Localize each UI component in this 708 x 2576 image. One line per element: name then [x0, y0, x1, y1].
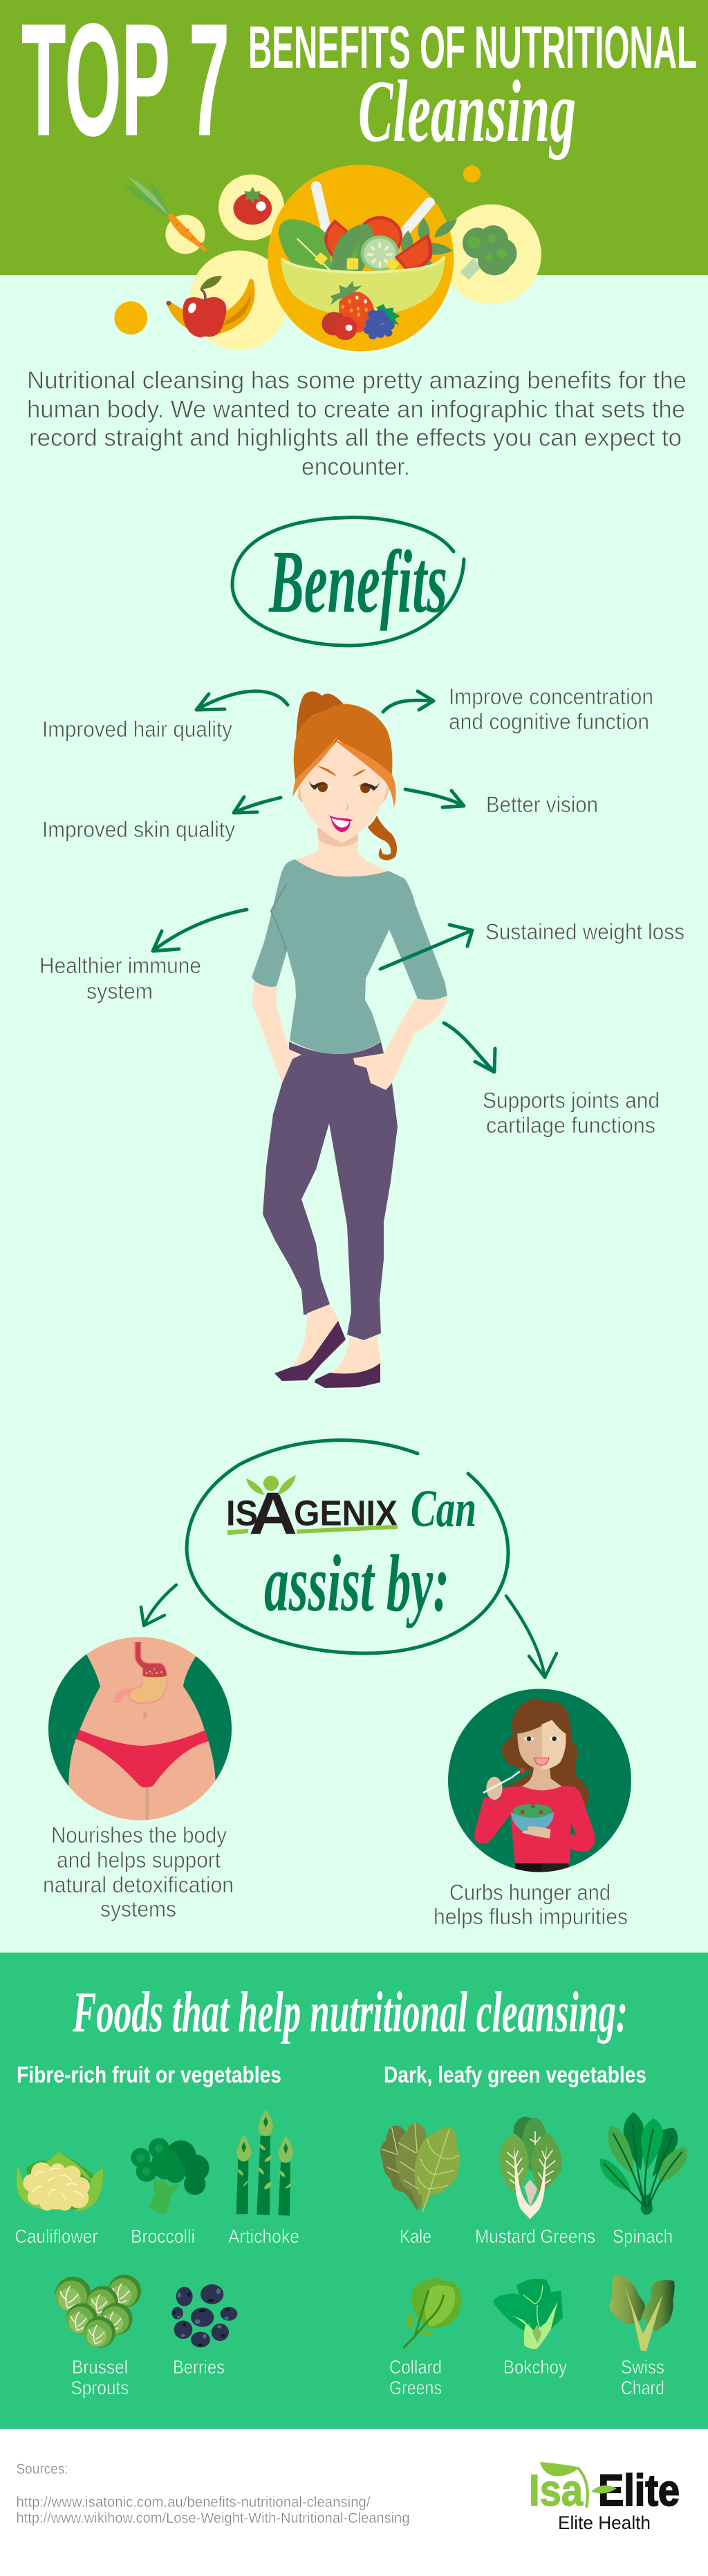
icon: broccoli — [460, 225, 516, 280]
food labels: Collard — [389, 2356, 442, 2378]
eyes — [309, 780, 380, 793]
food labels: Artichoke — [228, 2226, 299, 2247]
label: immune: system — [86, 979, 153, 1004]
face right — [541, 1720, 566, 1769]
icon: bokchoy — [493, 2279, 563, 2349]
neck shadow — [317, 828, 358, 847]
food labels: Swiss — [621, 2356, 664, 2378]
arrow: hair — [196, 691, 288, 710]
face — [299, 742, 387, 843]
icon: mustard greens — [499, 2117, 562, 2219]
title — [21, 0, 697, 169]
benefit arrows — [153, 691, 495, 1072]
arrow: weight loss — [380, 925, 472, 969]
hand — [486, 1777, 503, 1800]
icon: artichoke stalks — [236, 2109, 293, 2216]
panel: foods — [0, 1953, 708, 2429]
assist by script: assist by: — [264, 1538, 449, 1628]
hand-drawn ellipse — [232, 518, 464, 646]
mouth — [534, 1758, 549, 1765]
leafy vegetable icons — [380, 2112, 687, 2351]
circle icon: woman eating salad — [448, 1689, 631, 1872]
stomach liquid — [130, 1676, 167, 1702]
arm gap — [570, 1823, 576, 1835]
arrows from isagenix circle — [141, 1585, 557, 1677]
legs skin — [290, 1304, 381, 1375]
logo: isa elite: Elite Health — [558, 2512, 651, 2533]
right arm — [353, 995, 447, 1090]
hair — [502, 1698, 589, 1807]
hair main — [294, 704, 392, 781]
shoes — [274, 1321, 380, 1388]
icon: berries — [171, 2284, 237, 2347]
icon: swiss chard — [609, 2275, 675, 2351]
label: curbs hunger: helps flush impurities — [434, 1904, 628, 1929]
pants — [515, 1863, 569, 1872]
can script: Can — [411, 1480, 476, 1538]
icon: grapes — [364, 304, 400, 339]
hair bun — [296, 691, 344, 737]
food labels: Bokchoy — [503, 2356, 567, 2378]
label: nourishes: natural detoxification — [43, 1872, 234, 1897]
neck — [295, 827, 389, 876]
isagenix logo: GENIX — [294, 1494, 398, 1534]
label: nourishes: and helps support — [57, 1848, 221, 1872]
curl — [368, 816, 397, 861]
underwear — [75, 1730, 209, 1787]
food labels: Chard — [621, 2377, 664, 2398]
face left — [517, 1720, 552, 1769]
sources: http://www.isatonic.com.au/benefits-nutritional-cleansing/ — [17, 2494, 371, 2510]
food particles — [146, 1668, 162, 1675]
fork — [484, 1768, 525, 1792]
label: curbs hunger: Curbs hunger and — [449, 1880, 611, 1905]
big orange circle — [268, 164, 454, 351]
background — [448, 1689, 631, 1872]
icon: kale — [380, 2123, 460, 2212]
fringe — [292, 736, 396, 807]
label: curbs hunger — [434, 1880, 628, 1929]
label: joints — [483, 1088, 660, 1138]
ears — [298, 781, 389, 802]
circle icon: body and stomach — [48, 1637, 232, 1821]
green sides — [41, 1654, 244, 1785]
food labels: Spinach — [613, 2226, 673, 2247]
arrow: skin — [234, 797, 281, 813]
navel — [143, 1711, 147, 1719]
sweater fold — [271, 883, 287, 951]
benefits script: Benefits — [268, 532, 447, 632]
intro text: record straight and highlights all the effects you can expect to — [29, 424, 682, 451]
isagenix logo: A — [249, 1480, 297, 1547]
sweater — [474, 1786, 595, 1864]
icon: broccoli — [131, 2138, 209, 2213]
food labels: Broccolli — [131, 2226, 195, 2247]
left arm — [252, 978, 302, 1083]
logo: isa elite: Elite — [598, 2465, 680, 2515]
icon: brussel sprouts — [55, 2275, 141, 2348]
logo: isa elite — [529, 2462, 680, 2533]
intro text: encounter. — [301, 453, 410, 480]
intro text: Nutritional cleansing has some pretty amazing benefits for the — [27, 367, 687, 394]
intro text: human body. We wanted to create an infographic that sets the — [27, 396, 685, 423]
neck — [522, 1767, 562, 1791]
illustration: fruit and salad bowl — [114, 164, 541, 351]
label: skin: Improved skin quality — [42, 817, 235, 842]
head — [292, 691, 397, 876]
sources — [17, 2461, 409, 2526]
label: joints: Supports joints and — [483, 1088, 660, 1113]
arrow: joints — [444, 1023, 495, 1072]
subheading: fibre: Fibre-rich fruit or vegetables — [17, 2062, 281, 2087]
hand-drawn circle — [187, 1440, 508, 1653]
icon: tomato — [233, 187, 272, 225]
label: concentration — [449, 684, 653, 734]
pants — [263, 1042, 398, 1340]
food labels: Sprouts — [71, 2377, 129, 2398]
icon: cauliflower — [17, 2152, 103, 2212]
icon: cherries — [322, 312, 357, 340]
mouth — [328, 815, 353, 832]
stomach acid — [136, 1642, 167, 1677]
sweater — [252, 859, 447, 1054]
orange dots — [114, 165, 481, 335]
heading: benefits — [232, 518, 464, 646]
label: vision: Better vision — [486, 792, 598, 817]
salad bowl — [511, 1804, 554, 1839]
salad — [279, 216, 457, 272]
stomach outline — [129, 1642, 168, 1704]
fibre-rich vegetable icons — [17, 2109, 293, 2348]
heading: isagenix can assist by — [187, 1440, 508, 1653]
footer — [0, 2429, 708, 2576]
icon: collard greens — [403, 2278, 462, 2348]
label: immune: Healthier immune — [39, 953, 201, 978]
food labels: Greens — [389, 2377, 442, 2398]
food labels: Berries — [173, 2356, 225, 2378]
icon: utensils — [316, 186, 429, 235]
arrow: right — [506, 1596, 557, 1677]
subheading: leafy: Dark, leafy green vegetables — [384, 2062, 646, 2087]
pale yellow circles — [165, 174, 541, 350]
label: concentration: and cognitive function — [449, 709, 649, 734]
eyes — [523, 1736, 559, 1741]
label: nourishes: systems — [100, 1897, 176, 1921]
icon: strawberry — [330, 281, 374, 333]
isagenix logo: IS — [226, 1494, 258, 1534]
food labels: Cauliflower — [15, 2226, 98, 2247]
label: hair: Improved hair quality — [42, 717, 232, 742]
food labels: Kale — [400, 2226, 431, 2247]
label: concentration: Improve concentration — [449, 684, 653, 709]
skin — [48, 1637, 232, 1821]
icon: spinach — [600, 2112, 687, 2215]
food labels: Brussel — [72, 2356, 128, 2378]
eyebrows — [317, 766, 365, 776]
icon: banana — [166, 279, 255, 335]
icon: apple — [183, 276, 226, 337]
icon: carrot — [122, 176, 207, 251]
leg line — [145, 1787, 149, 1821]
sources: Sources: — [17, 2461, 68, 2477]
nose — [346, 803, 348, 811]
arrow: vision — [405, 789, 464, 807]
sources: http://www.wikihow.com/Lose-Weight-With-Nutritional-Cleansing — [17, 2510, 409, 2526]
label: nourishes: Nourishes the body — [51, 1823, 227, 1848]
food labels — [15, 2226, 673, 2398]
arrow: concentration — [383, 691, 434, 712]
food labels: Mustard Greens — [475, 2226, 595, 2247]
arrow: immune — [153, 910, 247, 951]
label: nourishes — [43, 1823, 234, 1921]
bowl rim — [281, 257, 445, 272]
label: immune — [39, 953, 201, 1004]
isagenix logo — [226, 1475, 398, 1547]
intro text — [27, 367, 687, 480]
woman figure — [252, 691, 447, 1388]
assist labels — [43, 1823, 628, 1929]
bowl — [281, 256, 445, 316]
arrow: left — [141, 1585, 176, 1626]
label: weight: Sustained weight loss — [485, 919, 684, 944]
duodenum — [113, 1689, 130, 1703]
logo: isa elite: Isa — [529, 2465, 583, 2515]
header band — [0, 0, 708, 275]
label: joints: cartilage functions — [486, 1113, 655, 1138]
benefit labels — [39, 684, 684, 1138]
